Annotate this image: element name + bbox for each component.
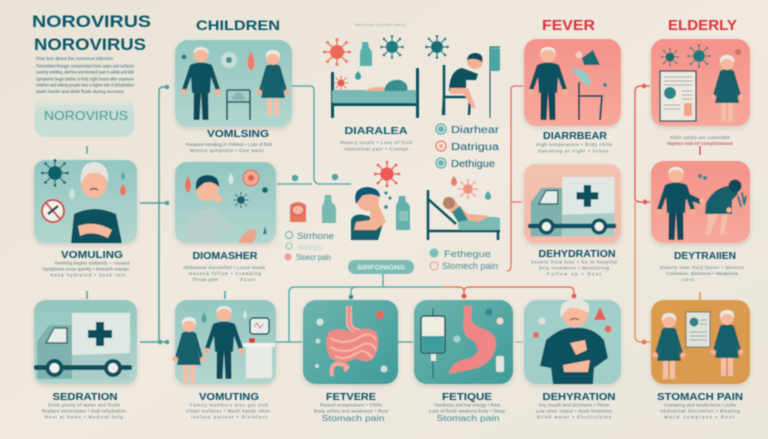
legend: sirrhone: Stoecr pain: [296, 252, 331, 262]
label: Vomuling: Keep hydrated • Seek rest: [50, 272, 126, 278]
title: Norovirus heading: NOROVIRUS: [32, 12, 151, 31]
legend: symptoms: [436, 124, 500, 170]
panel: ambulance: [34, 300, 137, 384]
legend: sirrhone: Stress: [297, 245, 323, 252]
caption under elderly panel: [667, 135, 733, 146]
label: Dehydration: Severe fluid loss • Go to hospital: [531, 260, 617, 264]
icons: viruses and bottle: [323, 35, 449, 90]
label: Stomach pain: Cramping and tenderness • Ache: [664, 402, 737, 408]
label: Stomach pain: Warm compress • Rest: [664, 414, 735, 420]
label: Vomuling: Symptoms occur quickly • Stomach cramps: [43, 266, 130, 272]
label: Sedration: Rest at home • Medical help: [45, 414, 124, 420]
label: Dehyration: DEHYRATION: [542, 392, 616, 403]
legend: fethegue: Fethegue: [444, 249, 491, 260]
label: Fetvere: FETVERE: [326, 392, 376, 403]
label: Deytraiien: Elderly lose fluid faster • Monitor: [660, 265, 745, 270]
label: Vomuting: Family members also get sick: [190, 402, 269, 408]
label: Diomasher: Fever: [240, 277, 256, 282]
connectors: teal centre: [276, 86, 523, 342]
label: Diomasher: DIOMASHER: [192, 251, 258, 262]
legend: symptoms: Dethigue: [451, 159, 495, 170]
label: Vomuling: VOMULING: [61, 250, 123, 261]
label: Vomuting: Clean surfaces • Wash hands often: [186, 408, 271, 414]
label: Stomach pain: Abdominal discomfort • Bloating: [660, 408, 741, 414]
intro text block: Transmitted through contaminated food, water and surfaces: [36, 64, 134, 68]
intro text block: children and elderly people face a higher risk of dehydration: [36, 82, 135, 88]
label: Fetvere: Raised temperature • Chills: [320, 402, 383, 408]
caption under elderly panel: Higher risk of complications: [668, 141, 732, 146]
label: Diarrbear: Sweating at night • Aches: [538, 148, 609, 154]
label: Dehydration: Drip treatment • Monitoring: [539, 266, 610, 270]
panel: elderly vomiting: [651, 161, 750, 243]
panel: ambulance peach: [524, 164, 621, 243]
icon: child coughing centre: [351, 161, 410, 240]
label: Dehyration: Drink water • Electrolytes: [537, 414, 612, 420]
label: Vomlsing: [186, 129, 273, 153]
intro text block: wash hands and drink fluids during recovery: [36, 89, 125, 94]
pill label: SIRFONIONS: [357, 264, 406, 272]
panel: children: [175, 40, 292, 127]
label: Sedration: [42, 392, 127, 420]
label: Vomuting: [186, 392, 271, 420]
label: Vomlsing: Monitor symptoms • Give water: [190, 148, 265, 153]
title: Norovirus heading: [32, 12, 151, 54]
icon: patient in bed right: [428, 176, 500, 240]
legend: sirrhone: Sirrhone: [297, 231, 334, 241]
legend: fethegue: Slomech pain: [442, 261, 498, 271]
icon: patient in bed: [331, 68, 419, 118]
panel: child coughing: [175, 162, 276, 243]
label: Vomlsing: VOMLSING: [207, 129, 269, 140]
heading: Fever: FEVER: [542, 17, 595, 34]
intro text block: causing vomiting, diarrhea and stomach pain in adults and kids: [36, 70, 134, 74]
label: Vomuling: Vomiting begins suddenly — nausea: [54, 260, 130, 266]
label: Dehydration: Follow up • Rest: [547, 272, 602, 276]
label: Fetvere: Stomach pain: [322, 414, 384, 423]
intro text block: Fine text about the norovirus infection: [36, 56, 114, 61]
legend: sirrhone: [284, 231, 334, 262]
label: Stomach pain: [657, 392, 743, 420]
label: Diarrbear: [536, 131, 613, 154]
label: Vomlsing: Frequent vomiting in children • Loss of fluid: [186, 142, 273, 147]
label: Vomuting: VOMUTING: [199, 392, 259, 403]
legend: fethegue: [430, 248, 498, 271]
label: Dehyration: Dry mouth and dizziness • Thirst: [539, 402, 610, 408]
label: Dehydration: [531, 249, 617, 276]
Norovirus label box: NOROVIRUS: [44, 109, 128, 123]
label: Diarrbear: High temperature • Body chills: [536, 142, 613, 147]
label: Diomasher: Nausea follow • Cramping: [189, 271, 262, 276]
intro text block: Symptoms begin twelve to forty eight hours after exposure: [36, 76, 135, 82]
top centre caption: Norovirus spreads easily: [355, 23, 405, 27]
label: Deytraiien: DEYTRAIIEN: [674, 251, 736, 262]
connectors: red and orange: [443, 84, 700, 344]
panel: intestines: [303, 300, 398, 384]
panel: stomach pain elderly: [651, 300, 750, 384]
legend: symptoms: Diarhear: [451, 125, 500, 136]
connectors: teal left: [87, 86, 225, 344]
legend: symptoms: Datrigua: [451, 142, 500, 153]
panel: man with chest pain: [524, 300, 621, 384]
label: Diaralea: Abdominal pain • Cramps: [344, 146, 409, 152]
label: Diaralea: Watery stools • Loss of fluid: [340, 140, 413, 145]
label: Fetique: Loss of fluids weakens body • Sleep: [429, 408, 506, 414]
label: Fetvere: [314, 392, 389, 423]
label: Deytraiien: [660, 251, 745, 282]
label: Vomuling: [43, 250, 130, 278]
label: Deytraiien: care: [682, 277, 695, 282]
panel: fever: [524, 39, 621, 126]
label: Fetique: Stomach pain: [436, 414, 500, 423]
label: Stomach pain: STOMACH PAIN: [657, 392, 743, 403]
label: Diomasher: [183, 251, 266, 282]
intro text block: [36, 56, 135, 94]
label: Deytraiien: Confusion, dizziness • Weakness: [666, 271, 739, 276]
icons: bottles left: [290, 195, 336, 223]
label: Fetvere: Body aches and weakness • Rest: [314, 408, 389, 414]
label: Sedration: SEDRATION: [52, 392, 118, 403]
label: Sedration: Drink plenty of water and fluids: [48, 402, 121, 408]
label: Fetique: [429, 392, 506, 423]
label: Dehydration: DEHYDRATION: [538, 249, 616, 260]
title: Norovirus heading: NOROVIRUS: [34, 35, 146, 54]
label: Diaralea: [340, 125, 413, 152]
icon: patient on chair with drip: [443, 47, 500, 118]
panel: family at clinic: [172, 300, 276, 384]
pill label: [348, 260, 414, 274]
heading: Elderly: ELDERLY: [668, 17, 737, 34]
label: Fetique: Tiredness and low energy • Rest: [434, 402, 501, 408]
label: Dehyration: Low urine output • Seek treatment: [536, 408, 613, 414]
label: Diaralea: DIARALEA: [344, 125, 408, 137]
panel: IV bag and stomach: [414, 300, 513, 384]
panel: sick man with virus: [34, 159, 137, 243]
label: Sedration: Replace electrolytes • Oral rehydration: [42, 408, 127, 414]
heading: Children: CHILDREN: [196, 17, 280, 33]
label: Diomasher: Throat pain: [192, 277, 219, 282]
label: Fetique: FETIQUE: [442, 392, 492, 403]
label: Dehyration: [536, 392, 616, 420]
label: Vomuting: Isolate patient • Disinfect: [191, 414, 268, 420]
label: Diomasher: Abdominal discomfort • Loose stools: [183, 265, 266, 270]
label: Diarrbear: DIARRBEAR: [543, 131, 608, 142]
caption under elderly panel: Older adults are vulnerable: [670, 135, 731, 140]
Norovirus label box: [35, 98, 134, 137]
panel: elderly: [651, 39, 750, 126]
